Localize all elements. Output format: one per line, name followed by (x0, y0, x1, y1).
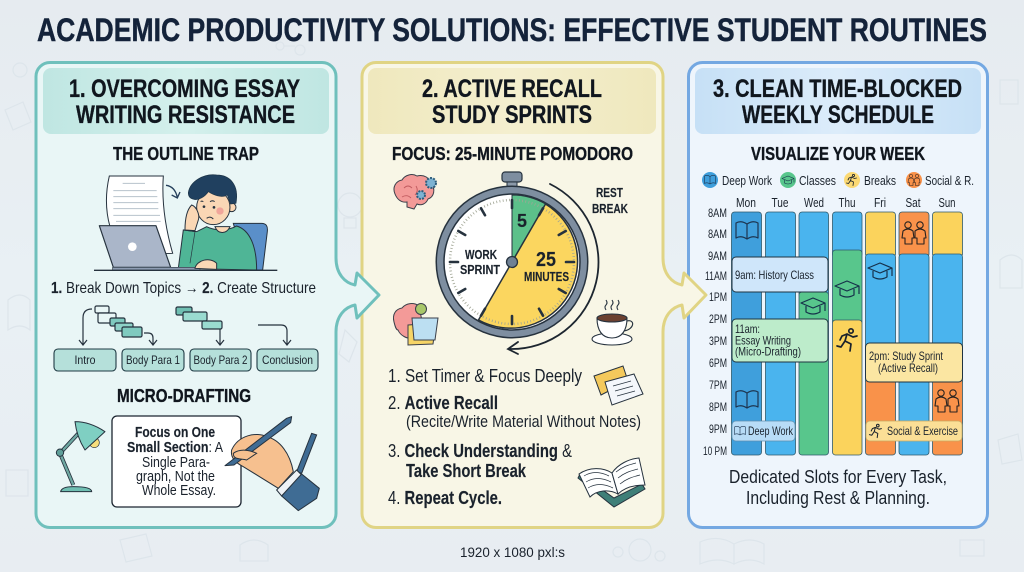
time axis labels: 8AM (708, 206, 727, 220)
panel 3 heading (713, 75, 962, 129)
time axis labels: 6PM (709, 356, 727, 370)
callout: focus on one small section: Small Section: A (127, 440, 223, 456)
event: essay writing: Essay Writing (735, 334, 791, 348)
label: rest break: REST (596, 186, 623, 200)
box: conclusion: Conclusion (262, 353, 313, 367)
icon: brain with gears (394, 175, 436, 209)
weekly schedule grid (732, 212, 962, 455)
legend: social and rest (906, 172, 974, 188)
caption: Including Rest & Planning. (746, 488, 930, 508)
weekday labels (736, 196, 956, 210)
label: rest break (592, 186, 628, 216)
time axis labels: 3PM (709, 334, 727, 348)
subheading: focus pomodoro: FOCUS: 25-MINUTE POMODORO (392, 144, 633, 164)
callout: focus on one small section (112, 416, 241, 507)
event: social and exercise: Social & Exercise (887, 424, 958, 438)
legend: classes (780, 172, 836, 188)
caption: Dedicated Slots for Every Task, (729, 467, 947, 487)
outline diagram (79, 306, 291, 345)
steps list: Take Short Break (406, 461, 527, 481)
callout: focus on one small section: Focus on One (135, 425, 215, 441)
legend: social and rest: Social & R. (925, 173, 974, 188)
panel: overcoming essay writing resistance (36, 62, 379, 528)
panel 3 heading: WEEKLY SCHEDULE (742, 101, 934, 129)
outline boxes (54, 349, 318, 371)
icon: note cards (594, 366, 643, 405)
icon: brain with notes (393, 304, 438, 345)
subheading: visualize your week: VISUALIZE YOUR WEEK (751, 144, 925, 164)
chair (233, 223, 267, 270)
box: conclusion (257, 349, 318, 371)
icon: open book (578, 458, 645, 507)
panel 1 header band (43, 68, 329, 134)
steps list: 1. Set Timer & Focus Deeply (388, 366, 582, 386)
steps list: 3. Check Understanding & (388, 441, 572, 461)
weekday labels: Mon (736, 196, 756, 210)
time axis labels: 1PM (709, 290, 727, 304)
panel 1 heading: 1. OVERCOMING ESSAY (69, 75, 300, 103)
illustration: frustrated student at laptop (94, 175, 277, 271)
time axis labels: 7PM (709, 378, 727, 392)
legend: breaks (844, 172, 896, 188)
subheading: the outline trap: THE OUTLINE TRAP (113, 144, 259, 164)
hand on head (185, 205, 199, 231)
legend: breaks: Breaks (864, 173, 896, 188)
icon: stopwatch: 25 (536, 249, 556, 271)
steps list: 4. Repeat Cycle. (388, 488, 502, 508)
panel 1 heading: WRITING RESISTANCE (76, 101, 295, 129)
time axis labels: 8AM (708, 227, 727, 241)
event: history class (732, 257, 828, 292)
weekday labels: Sat (906, 196, 921, 210)
legend: classes: Classes (799, 173, 836, 188)
panel 2 header band (368, 68, 656, 134)
box: body para 1: Body Para 1 (126, 353, 180, 367)
event: essay writing (732, 319, 828, 362)
laptop (99, 226, 171, 267)
panel 2 heading (422, 75, 602, 129)
callout: focus on one small section: graph, Not the (136, 469, 215, 485)
icon: coffee cup (592, 300, 633, 345)
legend: deep work: Deep Work (722, 173, 772, 188)
legend: deep work (702, 172, 772, 188)
caption (729, 467, 947, 508)
steps list: (Recite/Write Material Without Notes) (406, 413, 641, 431)
event: deep work: Deep Work (748, 424, 794, 438)
footer dimension note: 1920 x 1080 pxl:s (460, 544, 565, 560)
icon: desk lamp (56, 422, 105, 492)
box: body para 2: Body Para 2 (194, 353, 248, 367)
panel 2 heading: STUDY SPRINTS (432, 101, 592, 129)
time axis labels: 10 PM (703, 444, 727, 458)
torso (178, 226, 257, 270)
time axis labels: 11AM (705, 269, 727, 283)
panel 2 heading: 2. ACTIVE RECALL (422, 75, 602, 103)
weekday labels: Thu (838, 196, 856, 210)
box: body para 1 (122, 349, 184, 371)
panel: active recall study sprints (362, 62, 706, 528)
hair (188, 175, 237, 204)
weekday labels: Wed (804, 196, 824, 210)
weekday labels: Tue (772, 196, 789, 210)
time axis labels: 8PM (709, 400, 727, 414)
callout: focus on one small section: Single Para- (142, 455, 210, 471)
panel 3 header band (695, 68, 981, 134)
event: social and exercise (866, 421, 962, 441)
subheading: micro-drafting: MICRO-DRAFTING (117, 386, 251, 406)
icon: stopwatch (436, 172, 588, 338)
weekday labels: Fri (874, 196, 886, 210)
icon: stopwatch: SPRINT (460, 263, 500, 277)
event: essay writing: (Micro-Drafting) (735, 344, 801, 358)
illustration: hand writing with pen (225, 417, 319, 511)
box: body para 2 (190, 349, 251, 371)
event: study sprint: (Active Recall) (878, 361, 938, 375)
panel: clean time-blocked weekly schedule (688, 62, 988, 528)
event: essay writing: 11am: (735, 322, 760, 336)
panel 3 heading: 3. CLEAN TIME-BLOCKED (713, 75, 962, 103)
legend (702, 172, 974, 188)
small arrow (166, 185, 180, 198)
time axis labels: 2PM (709, 312, 727, 326)
time axis labels: 9AM (708, 249, 727, 263)
callout: focus on one small section: Whole Essay. (142, 483, 216, 499)
arrow: rest break cycle (508, 184, 598, 354)
green five-minute wedge (512, 195, 546, 262)
steps list: 2. Active Recall (388, 393, 498, 413)
schedule icons (736, 222, 959, 412)
icon: stopwatch: WORK (465, 248, 497, 262)
box: intro (54, 349, 116, 371)
icon: stopwatch: 5 (517, 211, 527, 231)
weekday labels: Sun (938, 196, 956, 210)
panel 1 heading (69, 75, 300, 129)
long document (106, 176, 173, 254)
event: history class: 9am: History Class (735, 268, 814, 282)
box: intro: Intro (74, 353, 96, 367)
event: study sprint: 2pm: Study Sprint (869, 349, 944, 363)
time axis labels: 9PM (709, 422, 727, 436)
event: deep work (732, 421, 795, 441)
yellow 25-minute wedge (478, 204, 578, 328)
ear (227, 203, 236, 212)
event: study sprint (866, 343, 962, 382)
time axis labels (703, 206, 727, 458)
steps list (388, 366, 641, 508)
outline step text: 1. Break Down Topics → 2. Create Structure (51, 280, 316, 297)
face (197, 190, 230, 225)
icon: stopwatch: MINUTES (524, 270, 569, 284)
label: rest break: BREAK (592, 202, 628, 216)
